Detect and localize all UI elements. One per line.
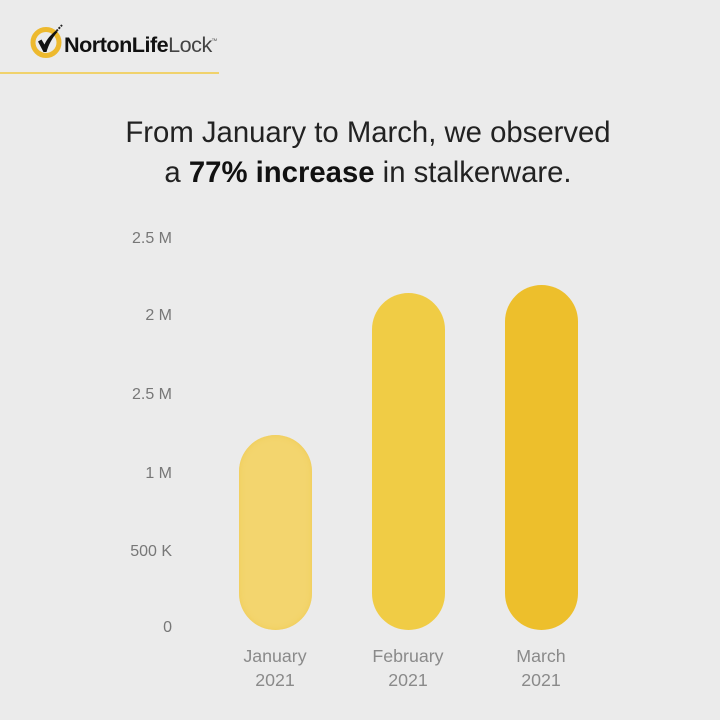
title: From January to March, we observed — [125, 116, 611, 148]
label: March 2021: 2021 — [521, 670, 561, 690]
label: February 2021 — [372, 646, 444, 690]
y axis labels: 1 M — [145, 465, 172, 482]
label: January 2021 — [243, 646, 307, 690]
label: January 2021: January — [243, 646, 307, 666]
bar: January 2021 — [239, 435, 312, 630]
y axis labels: 0 — [163, 619, 172, 636]
label: February 2021: 2021 — [388, 670, 428, 690]
label: January 2021: 2021 — [255, 670, 295, 690]
title: a 77% increase in stalkerware. — [164, 156, 572, 189]
bar chart — [130, 230, 578, 690]
y axis labels: 2.5 M — [132, 386, 172, 403]
logo wordmark: NortonLifeLockTM — [64, 32, 217, 57]
y axis labels: 500 K — [130, 543, 172, 560]
header divider line — [0, 72, 219, 74]
icon: check mark ring — [30, 24, 63, 58]
logo: NortonLifeLock — [30, 24, 217, 58]
label: February 2021: February — [372, 646, 444, 666]
bar: February 2021 — [372, 293, 445, 630]
y axis labels: 2 M — [145, 307, 172, 324]
label: March 2021 — [516, 646, 566, 690]
y axis labels — [130, 230, 172, 636]
y axis labels: 2.5 M — [132, 230, 172, 247]
label: March 2021: March — [516, 646, 566, 666]
title — [125, 116, 611, 189]
bar: March 2021 — [505, 285, 578, 630]
